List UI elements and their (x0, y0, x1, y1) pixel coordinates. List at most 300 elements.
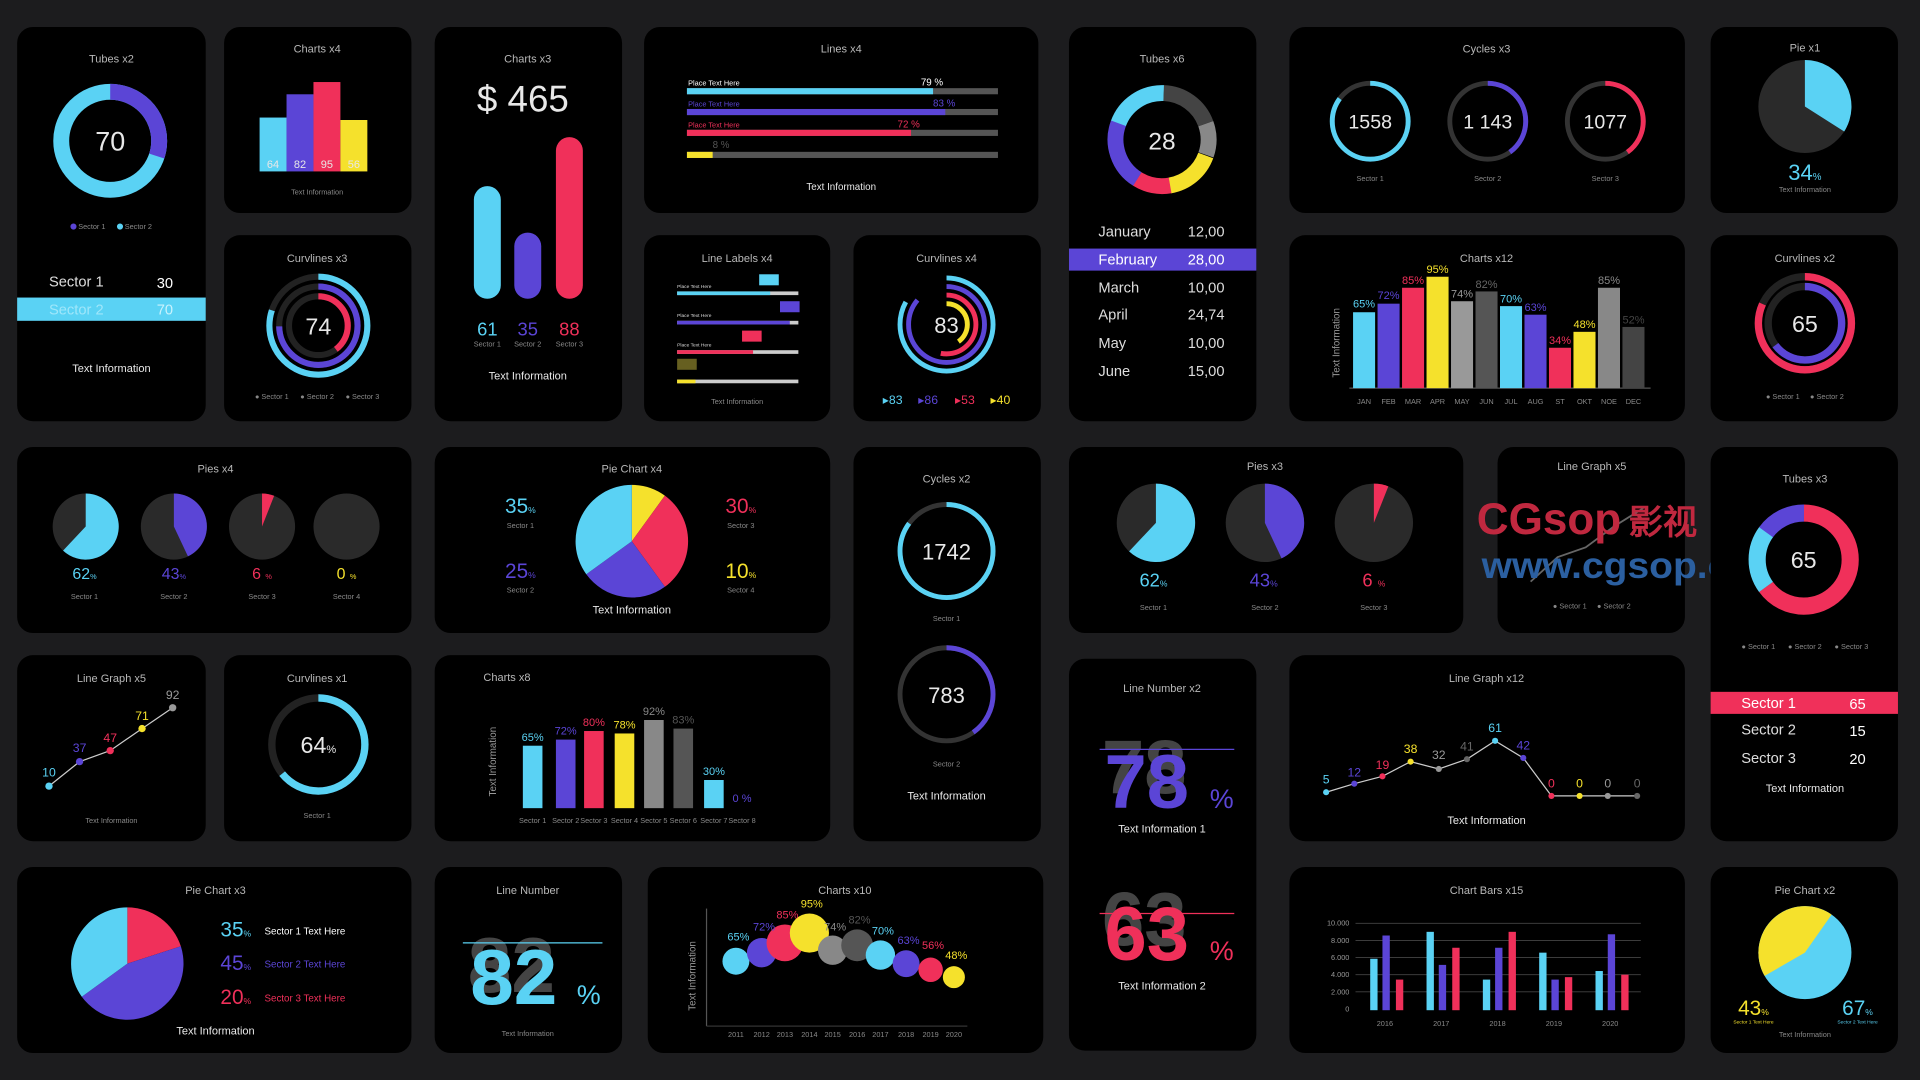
month table: 24,74 (1188, 308, 1225, 324)
panel: curvlines x4: Curvlines x4 (916, 253, 977, 265)
line graph: 0 (1548, 776, 1555, 790)
panel: line graph x5: Line Graph x5 (77, 673, 146, 685)
table: 30 (157, 276, 173, 292)
panel: line number x2 (1069, 659, 1256, 1051)
pies: 43% (162, 566, 186, 583)
number 82%: % (577, 980, 601, 1010)
bar chart: 70% (1500, 293, 1522, 305)
legend: 20% (220, 986, 252, 1009)
donut: 65 (1791, 547, 1817, 573)
panel: pie chart x4: Pie Chart x4 (602, 464, 662, 476)
month table: May (1098, 336, 1127, 352)
grouped bar chart: 2017 (1433, 1019, 1449, 1028)
panel: charts x8 (435, 655, 830, 841)
pies: Sector 2 (160, 592, 188, 601)
panel: charts x8: Text Information (488, 727, 499, 796)
values: ▸53 (955, 393, 975, 407)
bar chart: MAY (1454, 397, 1470, 406)
bar chart: 72% (555, 726, 577, 738)
number 82%: 82 (470, 933, 557, 1021)
panel: cycles x2 (853, 447, 1041, 841)
line graph: 32 (1432, 748, 1446, 762)
panel: charts x3 (435, 27, 622, 421)
line graph: 61 (1488, 721, 1502, 735)
bar chart: ST (1555, 397, 1565, 406)
legend: Sector 1 Text Here (264, 926, 345, 937)
panel: pie x1 (1711, 27, 1898, 213)
pies: Sector 3 (248, 592, 276, 601)
bar chart: 30% (703, 766, 725, 778)
labels: Sector 1 Text Here (1733, 1020, 1774, 1026)
legend: Sector 1 (78, 222, 105, 231)
panel: tubes x3: Tubes x3 (1782, 473, 1827, 485)
grouped bar chart: 2020 (1602, 1019, 1618, 1028)
panel: charts x12 (1289, 235, 1685, 421)
panel: pie x1: Text Information (1779, 185, 1831, 194)
panel: pie x1: 34% (1788, 160, 1822, 185)
panel: chart bars x15 (1289, 867, 1685, 1053)
panel: curvlines x1: Curvlines x1 (287, 673, 347, 685)
panel: pie chart x3: Pie Chart x3 (185, 885, 246, 897)
labels: Sector 4 (727, 586, 754, 595)
month table: 15,00 (1188, 364, 1225, 380)
tube bars: 88 (559, 319, 580, 340)
panel: cycles x2: Cycles x2 (923, 473, 970, 485)
grouped bar chart: 2.000 (1331, 987, 1349, 996)
bar chart: Sector 7 (700, 816, 728, 825)
labels: 30% (725, 495, 757, 518)
cycle rings: Sector 1 (1357, 174, 1384, 183)
pie (1758, 60, 1851, 153)
bubble chart: 65% (727, 931, 750, 943)
bar chart: 85% (1402, 275, 1424, 287)
table: Sector 3 (1741, 751, 1796, 767)
tube bars: Sector 3 (556, 340, 583, 349)
table: Sector 2 (49, 303, 104, 319)
bar chart: Sector 3 (580, 816, 608, 825)
bubble chart: 2017 (872, 1030, 889, 1039)
table: 70 (157, 303, 173, 319)
bar chart: 63% (1524, 302, 1547, 314)
panel: curvlines x3 (224, 235, 411, 421)
legend: 45% (220, 952, 252, 975)
bubble chart: 2019 (922, 1030, 939, 1039)
labelled lines: Place Text Here (677, 343, 712, 349)
bar chart: Sector 4 (611, 816, 638, 825)
grouped bar chart: 4.000 (1331, 970, 1349, 979)
line graph: 0 (1604, 776, 1611, 790)
bubble chart: 82% (849, 914, 871, 926)
bubble chart: 48% (945, 950, 968, 962)
line graph (1323, 721, 1641, 799)
progress lines: 83 % (933, 99, 956, 110)
bar chart: 64 (267, 159, 279, 171)
month table (1069, 224, 1256, 380)
number 78% (1100, 725, 1234, 825)
labelled lines: Place Text Here (677, 313, 712, 319)
legend: 35% (220, 919, 252, 942)
labels (505, 495, 757, 595)
rings (1758, 277, 1851, 370)
legend (70, 222, 152, 231)
line graph: 71 (135, 709, 149, 723)
panel: line labels x4: Line Labels x4 (702, 253, 773, 265)
bar chart: Sector 1 (519, 816, 546, 825)
value $465: $ 465 (477, 78, 569, 119)
pie (576, 485, 688, 597)
panel: line graph x5 (upper): Line Graph x5 (1557, 461, 1626, 473)
donut chart: 70 (95, 127, 125, 157)
bubble chart: 2013 (777, 1030, 793, 1039)
panel: curvlines x3: Curvlines x3 (287, 253, 347, 265)
panel: curvlines x2: Curvlines x2 (1775, 253, 1835, 265)
ring (272, 698, 365, 791)
line graph: 0 (1634, 776, 1641, 790)
panel: pie chart x2: Text Information (1779, 1030, 1831, 1039)
pies: Sector 1 (71, 592, 98, 601)
labels: Sector 3 (727, 521, 754, 530)
line graph with watermark: 影视 (1629, 504, 1697, 542)
values (883, 393, 1010, 407)
line graph: 19 (1376, 758, 1389, 772)
text info: Text Information (72, 363, 151, 375)
bar chart: 95% (1427, 264, 1449, 276)
bar chart: 48% (1573, 319, 1596, 331)
panel: line labels x4: Text Information (711, 397, 763, 406)
panel: tubes x2 (17, 27, 206, 421)
rings: 83 (934, 313, 959, 338)
panel: charts x4 (224, 27, 411, 213)
panel: line graph x12: Text Information (1447, 815, 1526, 827)
panel: lines x4: Text Information (806, 182, 876, 193)
panel: line graph x5 (17, 655, 206, 841)
panel: line number x2: Text Information 2 (1118, 980, 1206, 992)
bubble chart: 63% (898, 935, 920, 947)
bar chart: MAR (1405, 397, 1421, 406)
panel: curvlines x1 (224, 655, 411, 841)
number 63%: 63 (1102, 877, 1186, 962)
panel: line number (435, 867, 622, 1053)
labelled lines: Place Text Here (677, 284, 712, 290)
month table: April (1098, 308, 1128, 324)
labels: 67% (1842, 997, 1873, 1020)
panel: curvlines x1: Sector 1 (303, 811, 331, 820)
panel: charts x3: Charts x3 (504, 53, 551, 65)
panel: chart bars x15: Chart Bars x15 (1450, 885, 1523, 897)
month table: February (1098, 252, 1158, 268)
bar chart: 80% (583, 717, 605, 729)
pies: 0 % (337, 566, 357, 583)
panel: pie chart x4: Text Information (593, 604, 671, 616)
ring 1 (900, 504, 993, 598)
labelled lines (677, 274, 800, 383)
line graph: 38 (1404, 742, 1418, 756)
bar chart: NOE (1601, 397, 1617, 406)
tube bars: Sector 1 (474, 340, 501, 349)
month table: March (1098, 281, 1139, 297)
cycle rings: Sector 2 (1474, 174, 1501, 183)
line graph: 41 (1460, 740, 1474, 754)
panel: pie chart x2: Pie Chart x2 (1775, 885, 1835, 897)
values: ▸86 (918, 393, 938, 407)
bar chart: 72% (1378, 290, 1400, 302)
bar chart: 56 (348, 159, 360, 171)
line graph: 10 (42, 765, 56, 779)
tube bars: Sector 2 (514, 340, 541, 349)
line graph: 42 (1516, 738, 1530, 752)
bar chart: 52% (1622, 314, 1645, 326)
bubble chart: 2015 (824, 1030, 841, 1039)
panel: line graph x5 (upper): ● Sector 1 (1553, 602, 1587, 611)
bar chart: 65% (1353, 298, 1375, 310)
progress lines: 72 % (898, 119, 920, 130)
panel: charts x8: Charts x8 (483, 672, 531, 684)
panel: charts x12: Text Information (1332, 308, 1343, 378)
bubble chart: 2012 (753, 1030, 770, 1039)
title: tubes x2: Tubes x2 (89, 53, 134, 65)
panel: curvlines x3: ● Sector 1 (255, 392, 289, 401)
bar chart: JUN (1479, 397, 1494, 406)
concentric rings: 74 (305, 313, 331, 339)
ring: 64% (301, 732, 336, 758)
panel: curvlines x3: ● Sector 2 (300, 392, 334, 401)
number 63%: % (1210, 936, 1234, 966)
concentric rings (269, 277, 367, 375)
pie (71, 907, 184, 1020)
table: Sector 1 (1741, 696, 1796, 712)
progress lines: Place Text Here (688, 100, 740, 109)
pies: 62% (72, 566, 97, 583)
bar chart: Sector 6 (670, 816, 697, 825)
number 78%: 78 (1102, 725, 1186, 810)
grouped bar chart: 2016 (1377, 1019, 1393, 1028)
pies: Sector 1 (1140, 603, 1167, 612)
ring 2 (900, 648, 993, 741)
bubble chart: 2020 (946, 1030, 962, 1039)
bar chart: APR (1430, 397, 1445, 406)
bar chart: JUL (1504, 397, 1518, 406)
bar chart (1349, 264, 1651, 406)
table: 65 (1849, 697, 1866, 713)
legend: Sector 2 Text Here (264, 959, 345, 970)
ring 1: 1742 (922, 540, 971, 565)
panel: pie x1: Pie x1 (1790, 42, 1820, 54)
table (17, 275, 206, 321)
panel: line graph x12: Line Graph x12 (1449, 673, 1524, 685)
line graph with watermark: CGsop (1477, 495, 1621, 544)
panel: cycles x3 (1289, 27, 1685, 213)
bubble chart: 2016 (849, 1030, 865, 1039)
ring 2: 783 (928, 683, 965, 708)
labels: 35% (505, 495, 536, 518)
labels: Sector 2 Text Here (1837, 1020, 1878, 1026)
pies: Sector 2 (1251, 603, 1279, 612)
line graph: 37 (73, 741, 87, 755)
panel: pies x4: Pies x4 (197, 464, 234, 476)
panel: tubes x3: ● Sector 1 (1741, 642, 1775, 651)
pies: 43% (1250, 570, 1278, 591)
cycle rings: Sector 3 (1592, 174, 1619, 183)
table (1711, 692, 1898, 768)
table: Sector 1 (49, 275, 104, 291)
number 82%: 82 (468, 921, 555, 1009)
pies: Sector 3 (1360, 603, 1388, 612)
grouped bar chart: 8.000 (1331, 936, 1349, 945)
bubble chart: 74% (824, 922, 846, 934)
bar chart: Text Information (291, 188, 343, 197)
bar chart: 82 (294, 159, 306, 171)
panel: line number: Line Number (496, 885, 560, 897)
panel: line number x2: Text Information 1 (1118, 824, 1206, 836)
panel: charts x12: Charts x12 (1460, 253, 1513, 265)
bar chart: FEB (1381, 397, 1396, 406)
line graph: 92 (166, 688, 180, 702)
panel: cycles x2: Text Information (907, 791, 986, 803)
bar chart: Sector 8 (728, 816, 756, 825)
tube bars (474, 137, 583, 349)
bar chart: 34% (1549, 335, 1571, 347)
values: ▸83 (883, 393, 903, 407)
progress lines: Place Text Here (688, 79, 740, 88)
panel: tubes x3 (1711, 447, 1898, 841)
bar chart: 85% (1598, 275, 1620, 287)
bar chart: 78% (613, 720, 636, 732)
month table: 28,00 (1188, 252, 1225, 268)
labels (1733, 997, 1878, 1026)
panel: line number x2: Line Number x2 (1123, 683, 1201, 695)
line graph: 0 (1576, 776, 1583, 790)
pies: 62% (1139, 570, 1168, 591)
panel: curvlines x3: ● Sector 3 (346, 392, 379, 401)
panel: pies x4 (17, 447, 411, 633)
panel: lines x4 (644, 27, 1038, 213)
pies: Sector 4 (333, 592, 360, 601)
bar chart: OKT (1577, 397, 1593, 406)
panel: cycles x2: Sector 1 (933, 614, 960, 623)
panel: cycles x3: Cycles x3 (1463, 44, 1510, 56)
grouped bar chart: 10.000 (1327, 919, 1349, 928)
line graph: 12 (1347, 765, 1361, 779)
panel: line graph x5 (upper) (1477, 447, 1788, 633)
month table: 10,00 (1188, 281, 1225, 297)
panel: curvlines x2: ● Sector 2 (1810, 392, 1844, 401)
bubble chart: 56% (922, 940, 944, 952)
grouped bar chart: 2018 (1489, 1019, 1506, 1028)
line graph with watermark: www.cgsop.com (1481, 545, 1788, 586)
panel: tubes x3: ● Sector 3 (1835, 642, 1868, 651)
panel: cycles x2: Sector 2 (933, 760, 960, 769)
bar chart: DEC (1626, 397, 1642, 406)
bubble chart: 85% (776, 909, 799, 921)
cycle rings: 1558 (1348, 112, 1392, 134)
number 63%: 63 (1104, 892, 1189, 977)
panel: line graph x5 (upper): ● Sector 2 (1597, 602, 1631, 611)
tube bars: 35 (518, 319, 538, 340)
panel: curvlines x2: ● Sector 1 (1766, 392, 1800, 401)
progress lines (687, 78, 998, 158)
progress lines: Place Text Here (688, 120, 740, 129)
panel: pie chart x4 (435, 447, 830, 633)
rings: 65 (1792, 311, 1818, 337)
bar chart: 65% (522, 732, 544, 744)
panel: curvlines x4 (853, 235, 1041, 421)
values: ▸40 (991, 393, 1010, 407)
month table: June (1098, 364, 1130, 380)
multi donut: 28 (1148, 128, 1176, 155)
bar chart (519, 706, 756, 825)
number 78%: 78 (1104, 740, 1189, 825)
cycle rings: 1 143 (1463, 112, 1512, 134)
panel: tubes x3: Text Information (1766, 783, 1844, 795)
panel: pies x3 (1069, 447, 1463, 633)
panel: charts x10: Text Information (688, 941, 699, 1011)
month table: 10,00 (1188, 336, 1225, 352)
panel: pies x3: Pies x3 (1247, 461, 1283, 473)
bar chart: AUG (1528, 397, 1544, 406)
panel: line number: Text Information (502, 1029, 554, 1038)
bubble chart (707, 898, 968, 1039)
pies: 6 % (252, 566, 272, 583)
panel: charts x4: Charts x4 (294, 44, 341, 56)
grouped bar chart: 2019 (1546, 1019, 1562, 1028)
bubble chart: 2018 (898, 1030, 914, 1039)
labels: Sector 1 (507, 521, 534, 530)
table: Sector 2 (1741, 723, 1796, 739)
panel: line labels x4 (644, 235, 830, 421)
legend (220, 919, 345, 1009)
number 82% (463, 921, 602, 1021)
panel: pie chart x3 (17, 867, 411, 1053)
progress lines: 8 % (713, 140, 730, 151)
panel: charts x3: Text Information (489, 371, 567, 383)
line graph (42, 688, 180, 790)
labels: 43% (1738, 997, 1769, 1020)
legend: Sector 2 (125, 222, 152, 231)
bubble chart: 70% (872, 925, 894, 937)
bar chart: 74% (1451, 289, 1473, 301)
tube bars: 61 (477, 319, 498, 340)
panel: tubes x3: ● Sector 2 (1788, 642, 1822, 651)
bar chart: Sector 2 (552, 816, 579, 825)
bar chart: 82% (1475, 279, 1498, 291)
panel: tubes x6: Tubes x6 (1140, 53, 1184, 65)
pies: 6 % (1362, 570, 1386, 591)
bar chart: 0 % (733, 793, 752, 805)
grouped bar chart: 0 (1345, 1004, 1349, 1013)
progress lines: 79 % (921, 78, 943, 89)
legend: Sector 3 Text Here (264, 994, 345, 1005)
bubble chart: 2014 (801, 1030, 818, 1039)
labels: Sector 2 (507, 586, 534, 595)
panel: charts x10 (648, 867, 1043, 1053)
donut (1739, 495, 1869, 625)
panel: tubes x6 (1069, 27, 1256, 421)
line graph: 47 (103, 731, 117, 745)
month table: 12,00 (1188, 224, 1225, 240)
cycle rings: 1077 (1584, 112, 1627, 134)
bubble chart: 2011 (728, 1030, 744, 1039)
bubble chart: 95% (801, 898, 823, 910)
line graph with watermark (1477, 495, 1788, 586)
panel: charts x10: Charts x10 (818, 885, 872, 897)
table: 15 (1849, 724, 1866, 740)
multi donut (1098, 75, 1226, 204)
number 63% (1100, 877, 1234, 977)
panel: pie chart x3: Text Information (176, 1026, 255, 1038)
panel: pie chart x2 (1711, 867, 1898, 1053)
bar chart: JAN (1357, 397, 1371, 406)
bar chart: 92% (643, 706, 665, 718)
